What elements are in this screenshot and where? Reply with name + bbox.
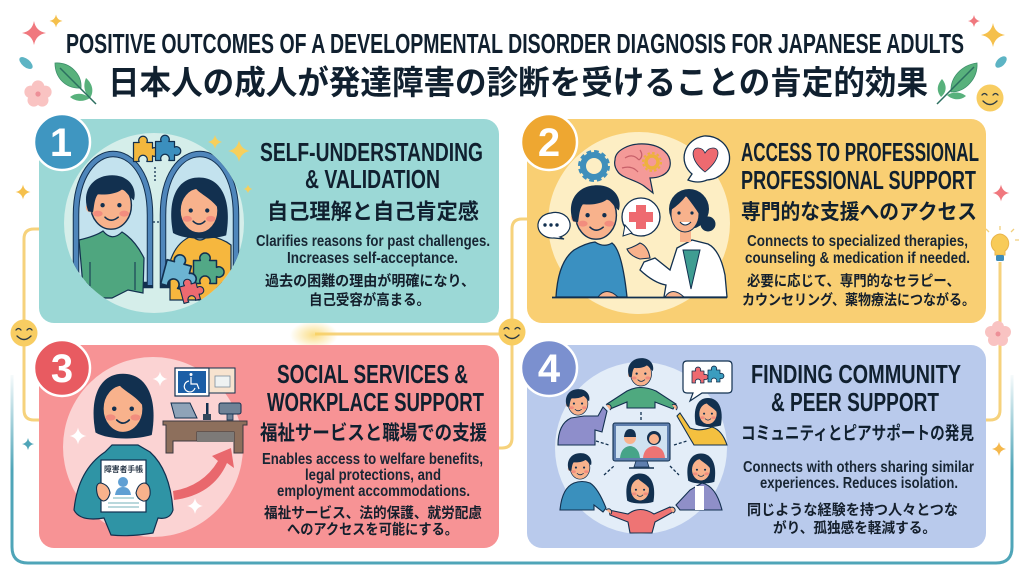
description: Increases self-acceptance. (287, 250, 458, 267)
description: Clarifies reasons for past challenges. (256, 233, 490, 250)
outer frame line (12, 375, 1012, 563)
illustration: connected community (555, 358, 732, 534)
icon: speech dots bubble (538, 212, 570, 239)
number badge 3: 3 (51, 347, 73, 391)
heading: & VALIDATION (305, 164, 440, 194)
description: experiences. Reduces isolation. (760, 475, 958, 492)
icon: brain (615, 144, 670, 193)
description: 自己受容が高まる。 (309, 291, 430, 309)
disability card: 障害者手帳 (104, 464, 143, 475)
heading: WORKPLACE SUPPORT (267, 387, 484, 417)
description: カウンセリング、薬物療法につながる。 (742, 291, 975, 309)
description: Connects with others sharing similar (743, 459, 974, 476)
description (743, 459, 974, 537)
illustration: person with disability card and workplace (63, 357, 247, 537)
description: 福祉サービス、法的保護、就労配慮 (264, 504, 482, 522)
notice paper (209, 368, 235, 393)
heading: & PEER SUPPORT (771, 387, 939, 417)
connector glow (290, 321, 338, 349)
number badge 4 (521, 340, 577, 396)
description (262, 451, 483, 538)
illustration: two people in mirrors (64, 133, 252, 313)
heading: 福祉サービスと職場での支援 (260, 422, 487, 444)
heading (260, 359, 487, 444)
person: lower right (676, 454, 722, 510)
person: top (607, 358, 676, 409)
decorations: side items (16, 184, 1010, 456)
description: 同じような経験を持つ人々とつな (747, 502, 958, 519)
connector lines (24, 219, 1000, 448)
heading: 自己理解と自己肯定感 (267, 199, 479, 224)
description: 過去の困難の理由が明確になり、 (265, 272, 475, 290)
description: がり、孤独感を軽減する。 (773, 519, 936, 537)
description: counseling & medication if needed. (745, 250, 970, 267)
smileys on connectors (10, 318, 526, 346)
number badge 3 (34, 340, 90, 396)
decorations: top right (937, 15, 1009, 112)
icon: light bulb (981, 226, 1019, 261)
desk (163, 403, 247, 453)
person: lower left (560, 453, 606, 512)
illustration: patient and doctor (538, 132, 730, 314)
red arrow (173, 448, 234, 500)
puzzle speech bubble (683, 361, 732, 401)
decorations: top left (17, 14, 96, 107)
description (742, 233, 975, 309)
description: Connects to specialized therapies, (747, 233, 968, 250)
disability card (101, 460, 146, 512)
panel 3: social services (39, 345, 499, 548)
heading: FINDING COMMUNITY (751, 359, 961, 389)
description (256, 233, 490, 309)
icon: medical cross bubble (622, 198, 660, 236)
person: upper left (558, 389, 607, 445)
heading: 専門的な支援へのアクセス (741, 201, 977, 224)
heading (741, 359, 974, 444)
heading: SELF-UNDERSTANDING (260, 137, 483, 167)
doctor (640, 189, 727, 297)
video call monitor (613, 423, 670, 468)
panel 1: self-understanding (39, 119, 499, 323)
heading (741, 137, 979, 224)
number badge 1: 1 (50, 121, 72, 165)
panel 2: professional support (527, 119, 986, 323)
number badge 2 (521, 114, 577, 170)
description: employment accommodations. (277, 483, 470, 500)
heading (260, 137, 483, 224)
description: へのアクセスを可能にする。 (287, 520, 458, 538)
heading: SOCIAL SERVICES & (277, 359, 468, 389)
title: Japanese: 日本人の成人が発達障害の診断を受けることの肯定的効果 (108, 64, 928, 101)
number badge 1 (34, 114, 90, 170)
person: upper right (677, 398, 727, 445)
description: 必要に応じて、専門的なセラピー、 (747, 272, 960, 290)
heading: コミュニティとピアサポートの発見 (741, 422, 974, 444)
panel 4: community (527, 345, 986, 548)
person: bottom (609, 474, 673, 533)
number badge 2: 2 (538, 121, 560, 165)
description: legal protections, and (305, 467, 441, 484)
number badge 4: 4 (538, 347, 561, 391)
icon: flower right (985, 321, 1011, 346)
wheelchair sign (175, 368, 209, 396)
description: Enables access to welfare benefits, (262, 451, 483, 468)
icon: heart bubble (684, 136, 730, 182)
